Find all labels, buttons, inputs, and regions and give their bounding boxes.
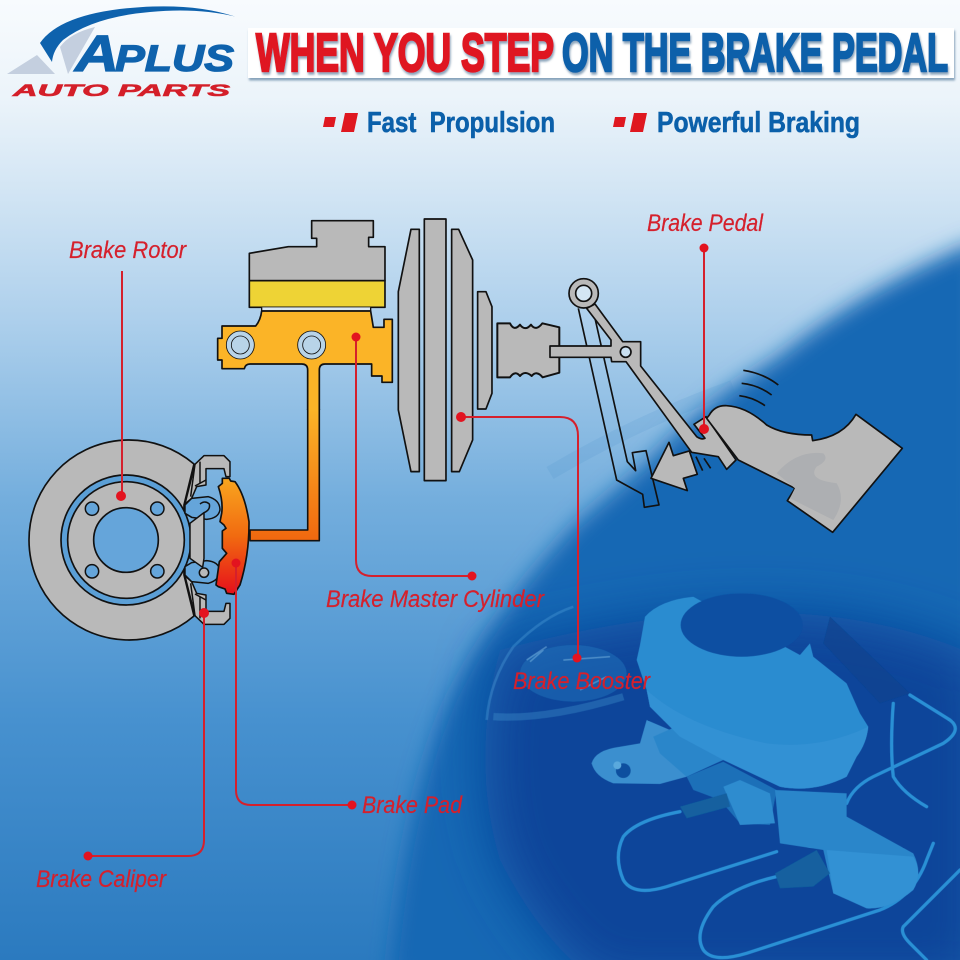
brake rotor (29, 440, 194, 640)
callout: brake caliper (36, 608, 209, 893)
rear cylinder (775, 790, 918, 908)
foot shading (777, 453, 841, 520)
callout: brake pad: Brake Pad (362, 792, 463, 819)
brake booster (398, 219, 492, 481)
callout: brake master cylinder: Brake Master Cylinder (326, 586, 545, 613)
direction arrow (651, 442, 697, 491)
pedal arm (550, 304, 736, 469)
callout: brake booster: Brake Booster (513, 668, 651, 695)
callout: brake master cylinder (326, 332, 545, 613)
callout: brake pedal: Brake Pedal (647, 210, 764, 237)
feature: powerful braking: Powerful Braking (657, 107, 860, 139)
hoses (823, 617, 910, 703)
bolt holes (85, 502, 164, 578)
background: dark blue sweep (390, 240, 960, 960)
logo swoosh (40, 6, 235, 62)
master cylinder (218, 221, 392, 541)
cylinder body (218, 311, 392, 410)
return link outline (578, 308, 659, 507)
feature: fast propulsion: Fast Propulsion (367, 107, 555, 139)
pivot (620, 347, 631, 357)
brake caliper (185, 456, 230, 624)
brake fluid line (250, 409, 319, 541)
tubes (618, 695, 960, 960)
title banner (248, 23, 954, 83)
bracket (592, 720, 687, 784)
caliper upper (185, 456, 230, 519)
top ring (569, 279, 598, 308)
block (653, 723, 723, 777)
piston (190, 513, 204, 567)
photo: master cylinder (487, 593, 960, 960)
foot (707, 406, 902, 532)
brake pad (216, 478, 249, 594)
hub hole (94, 508, 158, 572)
callout: brake caliper: Brake Caliper (36, 866, 167, 893)
reservoir (249, 221, 385, 281)
callout: brake booster (456, 412, 651, 695)
pedal assembly (550, 279, 902, 532)
nuts (680, 793, 830, 888)
callout: brake pad (232, 558, 463, 819)
callout: brake pedal (647, 210, 764, 434)
caliper lower (185, 561, 230, 624)
ports (226, 331, 326, 359)
logo (7, 6, 235, 100)
front cylinder (723, 780, 775, 825)
callout: brake rotor (69, 237, 187, 501)
pushrod boot (497, 323, 559, 377)
logo grey wedges (7, 27, 95, 74)
logo: PLUS (115, 38, 234, 79)
title red: WHEN YOU STEP (256, 23, 554, 83)
small plate (478, 292, 492, 409)
front plate (398, 229, 419, 472)
reservoir (637, 597, 868, 789)
motion lines (739, 370, 778, 406)
middle plate (424, 219, 446, 481)
callout: brake rotor: Brake Rotor (69, 237, 187, 264)
fluid band (249, 281, 385, 307)
logo word: A (73, 25, 119, 82)
rear plate (452, 229, 473, 472)
feature: fast propulsion (323, 107, 555, 139)
logo tagline: AUTO PARTS (11, 82, 230, 100)
